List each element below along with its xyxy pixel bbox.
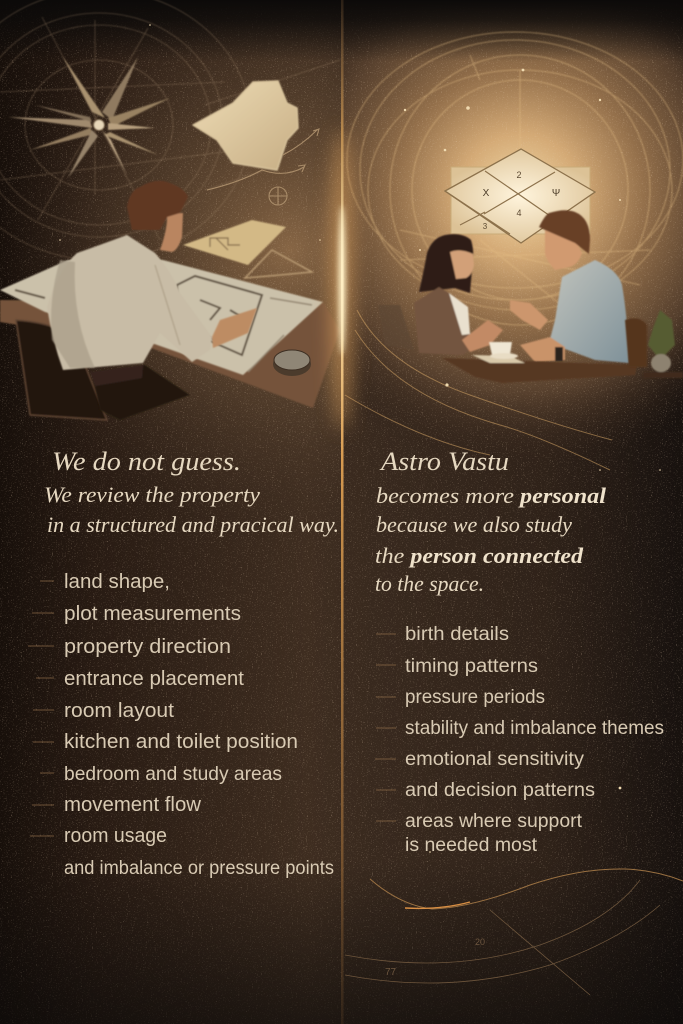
right subheading: the person connected (375, 543, 584, 568)
blueprint (0, 260, 323, 375)
natal chart: 2 (516, 170, 522, 180)
natal chart: X (483, 188, 490, 199)
right list: stability and imbalance themes (405, 718, 664, 739)
cafe table (442, 342, 637, 383)
central divider (330, 0, 354, 1024)
right list (375, 624, 664, 856)
left text block (28, 447, 339, 879)
right subheading: becomes more personal (376, 483, 607, 508)
left subheading line two: in a structured and pracical way. (47, 512, 339, 537)
man talking (510, 210, 629, 363)
right heading: Astro Vastu (379, 447, 509, 476)
flowing gold curves (345, 310, 612, 470)
land shape stone (193, 81, 298, 170)
right list: birth details (405, 624, 509, 645)
left list: room layout (64, 700, 174, 722)
right list: emotional sensitivity (405, 749, 585, 770)
compass rose (8, 57, 170, 178)
right list: and decision patterns (405, 780, 595, 801)
left list: property direction (64, 636, 231, 658)
right subheading: because we also study (376, 512, 572, 537)
right list: areas where support (405, 811, 583, 832)
right list: is needed most (405, 835, 538, 856)
sparkles (59, 24, 661, 853)
left subheading line one: We review the property (44, 482, 260, 507)
chair (16, 320, 107, 420)
left list: bedroom and study areas (64, 763, 282, 785)
compass puck (273, 350, 311, 376)
left list: land shape, (64, 571, 170, 593)
right list: timing patterns (405, 656, 538, 677)
chair and potted plant (378, 305, 683, 378)
astrology rings (347, 32, 683, 325)
left list: movement flow (64, 794, 202, 816)
compass chart line art (0, 0, 340, 260)
woman (414, 234, 503, 355)
left list: kitchen and toilet position (64, 731, 298, 753)
desk (0, 300, 340, 408)
left list (28, 571, 334, 879)
bottom astrological arcs: 20 (475, 937, 485, 947)
left list: room usage (64, 825, 167, 847)
natal chart: Ψ (552, 188, 560, 199)
right text block (375, 447, 664, 856)
bottom astrological arcs: 77 (385, 967, 397, 978)
natal chart: 4 (516, 208, 522, 218)
natal chart (445, 149, 595, 243)
left list: and imbalance or pressure points (64, 858, 334, 879)
right list: pressure periods (405, 687, 545, 708)
plan sheet on wall (183, 220, 312, 278)
left list: entrance placement (64, 668, 244, 690)
right subheading: to the space. (375, 571, 484, 596)
direction arrows and symbol (207, 129, 319, 205)
left list: plot measurements (64, 603, 241, 625)
natal chart: 3 (483, 222, 488, 231)
man studying plan (47, 181, 257, 420)
right subheading (375, 483, 607, 596)
bottom astrological arcs (345, 869, 683, 995)
left heading: We do not guess. (52, 447, 241, 476)
